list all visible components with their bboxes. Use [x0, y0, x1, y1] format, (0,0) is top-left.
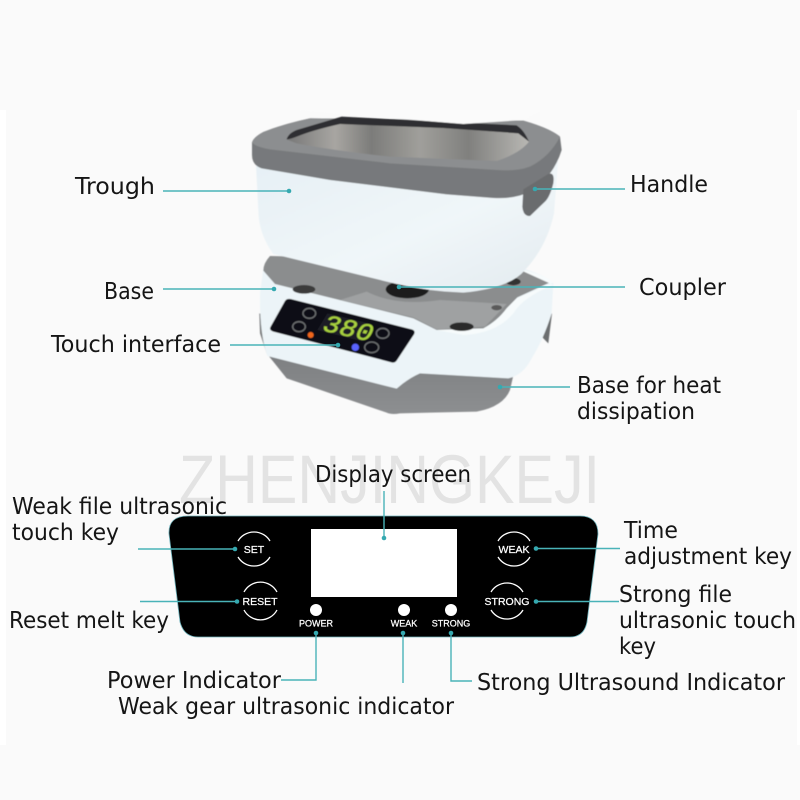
label: Strong file ultrasonic touch key: [619, 582, 796, 660]
label: Coupler: Coupler: [639, 275, 727, 301]
SET key: [238, 532, 270, 566]
WEAK key: WEAK: [499, 544, 529, 556]
label: Time adjustment key: Time: [623, 518, 678, 544]
label: Base for heat dissipation: dissipation: [577, 399, 695, 425]
label: Weak file ultrasonic touch key: Weak file ultrasonic: [12, 494, 227, 520]
label: Weak file ultrasonic touch key: [12, 494, 227, 546]
label: Strong file ultrasonic touch key: key: [619, 634, 656, 660]
label: Trough: Trough: [74, 174, 155, 200]
label: Reset melt key: Reset melt key: [9, 608, 169, 634]
label: Time adjustment key: adjustment key: [624, 544, 792, 570]
stainless steel tub opening: [287, 117, 529, 161]
label: Display screen: Display screen: [315, 462, 471, 488]
label: Time adjustment key: [623, 518, 792, 570]
RESET key: [242, 582, 278, 620]
trough rim: [252, 118, 562, 198]
base for heat dissipation: [259, 313, 515, 414]
strong indicator: STRONG: [432, 618, 470, 628]
display screen: [311, 529, 457, 597]
label: Power Indicator: Power Indicator: [107, 668, 282, 694]
touch panel on base: 380: [317, 311, 379, 348]
coupler: [386, 280, 429, 298]
label: Base for heat dissipation: [577, 373, 721, 425]
base tray: [263, 256, 552, 330]
watermark: ZHENJINGKEJI: [179, 441, 600, 518]
weak indicator: WEAK: [391, 618, 417, 628]
base housing: [260, 267, 553, 389]
STRONG key: STRONG: [485, 596, 529, 608]
RESET key: RESET: [242, 596, 278, 608]
label: Touch interface: Touch interface: [50, 332, 221, 358]
tray feet: [293, 285, 315, 294]
power indicator: POWER: [299, 618, 333, 628]
WEAK key: [498, 532, 530, 566]
product illustration: ultrasonic cleaner: [252, 110, 562, 414]
trough body: [256, 158, 558, 293]
lid edge: [293, 110, 543, 124]
label: Strong file ultrasonic touch key: ultrasonic touch: [619, 608, 796, 634]
label: Handle: Handle: [630, 172, 708, 198]
strong indicator: [432, 604, 470, 628]
label: Weak file ultrasonic touch key: touch key: [12, 520, 119, 546]
label: Weak gear ultrasonic indicator: Weak gear ultrasonic indicator: [118, 694, 455, 720]
leader dots: [233, 187, 538, 635]
handle recess: [522, 174, 554, 216]
weak indicator: [391, 604, 417, 628]
control panel diagram: [169, 516, 598, 637]
base right highlight: [437, 268, 553, 335]
rear foot: [530, 313, 552, 343]
STRONG key: [485, 583, 529, 619]
power indicator: [299, 604, 333, 628]
touch panel on base: [270, 299, 415, 363]
label: Base for heat dissipation: Base for heat: [577, 373, 721, 399]
label: Strong Ultrasound Indicator: Strong Ultrasound Indicator: [477, 670, 786, 696]
SET key: SET: [244, 544, 265, 556]
leader lines: [138, 189, 625, 683]
label: Base: Base: [104, 279, 154, 305]
label: Strong file ultrasonic touch key: Strong file: [619, 582, 732, 608]
